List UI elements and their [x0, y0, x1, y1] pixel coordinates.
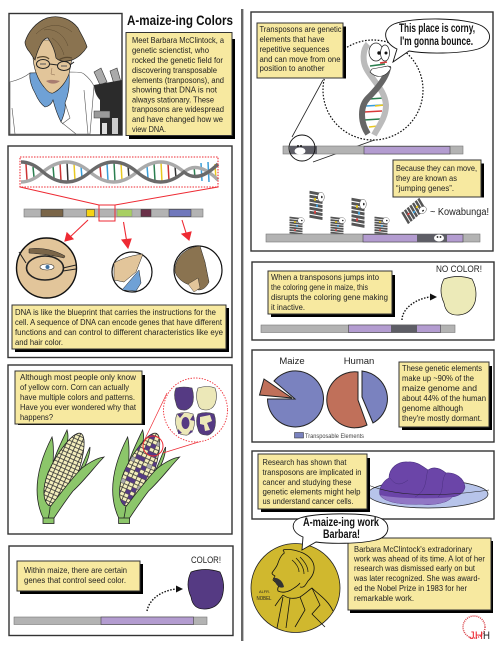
red zoom callout	[143, 378, 228, 456]
red arrows	[65, 220, 191, 248]
text box: intro: elements (tranposons), and	[132, 75, 224, 85]
label: color: COLOR!	[191, 555, 221, 565]
text box: disruption	[268, 271, 395, 317]
vertical divider	[241, 9, 243, 641]
text box: jumping genes: they are known as	[396, 173, 457, 183]
text box: transposon definition: Transposons are genetic	[260, 24, 342, 34]
text box: seed color: genes that control seed color.	[24, 575, 126, 585]
text box: research	[258, 454, 370, 512]
text box: Nobel Prize	[348, 538, 493, 613]
logo: JH	[469, 630, 483, 642]
text box: corn colors: Have you ever wondered why that	[20, 402, 137, 412]
text box: disruption: When a transposons jumps into	[271, 272, 379, 282]
text box: research: cancer and studying these	[262, 477, 352, 487]
text box: jumping genes	[393, 160, 484, 198]
text box: percentages: make up ~90% of the	[402, 373, 474, 383]
circle: eye	[16, 238, 76, 298]
gene bar disrupted	[261, 325, 455, 332]
circle: hair	[174, 246, 222, 294]
arrow: dotted	[147, 586, 183, 611]
gene bar	[14, 617, 207, 624]
magnifier lines	[292, 80, 383, 162]
red zoom frame	[20, 157, 218, 205]
arrow: dotted	[402, 294, 437, 320]
text box: seed color	[17, 561, 143, 594]
panel: genome share	[252, 350, 494, 442]
text box: DNA: DNA is like the blueprint that carries the instructions for the	[15, 307, 216, 317]
text box: intro: discovering transposable	[132, 65, 217, 75]
face	[33, 40, 72, 93]
hair	[25, 17, 87, 61]
text box: percentages	[399, 362, 492, 430]
text box: jumping genes: “jumping genes”.	[396, 183, 454, 193]
text box: intro: always stationary. These	[132, 94, 214, 104]
label: human: Human	[344, 356, 374, 367]
text box: corn colors: happens?	[20, 412, 53, 422]
icon: yellow corn	[36, 428, 104, 524]
gene bar with transposon	[283, 135, 463, 161]
label: maize: Maize	[279, 356, 305, 367]
glasses and features	[36, 57, 74, 84]
panel: cancer	[252, 451, 494, 519]
dashed circle	[323, 40, 423, 140]
medal name: ALFR.	[259, 589, 270, 594]
text box: DNA: functions and can control to different characteristics like eye	[15, 327, 223, 337]
text box: intro: and have changed how we	[132, 114, 223, 124]
text box: percentages: These genetic elements	[402, 363, 482, 373]
text box: intro	[126, 32, 235, 139]
text box: jumping genes: Because they can move,	[396, 163, 477, 173]
text box: intro: tranposons are widespread	[132, 104, 224, 114]
circle: collar	[112, 252, 152, 292]
microscope	[94, 68, 122, 135]
text box: research: transposons are implicated in	[262, 467, 362, 477]
panel: DNA blueprint	[8, 146, 232, 358]
icon: pale kernel	[441, 276, 476, 315]
DNA character	[362, 43, 391, 135]
text box: DNA	[12, 305, 229, 352]
jumping transposons	[290, 192, 428, 234]
logo: H	[483, 630, 490, 642]
speech bubble: praise: Barbara!	[323, 529, 360, 541]
text box: transposon definition: repetitive sequences	[260, 44, 330, 54]
text box: corn colors: have multiple colors and patterns.	[20, 392, 135, 402]
text box: percentages: genome although	[402, 403, 463, 413]
text box: DNA: cell. A sequence of DNA can encode genes that have different	[15, 317, 223, 327]
text box: intro: showing that DNA is not	[132, 84, 218, 94]
speech bubble: praise: A-maize-ing work	[303, 517, 379, 529]
text box: corn colors: of yellow corn. Corn can actually	[20, 382, 130, 392]
text box: intro: rocked the genetic field for	[132, 55, 223, 65]
text box: research: Research has shown that	[262, 457, 347, 467]
text box: intro: genetic scienctist, who	[132, 45, 209, 55]
panel: color gene	[9, 546, 233, 636]
text box: percentages: they're mostly dormant.	[402, 413, 482, 423]
text box: transposon definition: and can move from one	[260, 54, 341, 64]
speech bubble: corny	[386, 19, 490, 62]
panel: corn	[8, 365, 232, 534]
text box: Nobel Prize: Barbara McClintock's extradorinary	[354, 544, 473, 554]
text box: disruption: the coloring gene in maize, this	[271, 282, 368, 292]
text box: Nobel Prize: ed the Nobel Prize in 1983 for her	[354, 583, 467, 593]
speech bubble: praise	[293, 514, 388, 550]
petri dish and cells	[368, 462, 489, 508]
text box: corn colors: Although most people only know	[20, 372, 137, 382]
label: no color: NO COLOR!	[436, 264, 482, 274]
lab coat	[10, 72, 94, 134]
icon: multicolored corn	[110, 427, 180, 524]
gene bar bottom	[266, 234, 480, 242]
icon: purple kernel	[188, 570, 224, 609]
speech bubble: corny: I'm gonna bounce.	[400, 36, 473, 48]
text box: disruption: it inactive.	[271, 302, 305, 312]
text box: intro: view DNA.	[132, 124, 166, 134]
text box: DNA: and hair color.	[15, 337, 63, 347]
text box: transposon definition	[257, 23, 346, 78]
coat lapels	[12, 90, 88, 134]
text box: percentages: about 44% of the human	[402, 393, 486, 403]
text box: Nobel Prize: was later recognized. She was award-	[353, 573, 480, 583]
portrait engraving	[272, 549, 333, 628]
label: Kowabunga: ~ Kowabunga!	[430, 207, 489, 218]
medal name: NOBEL	[256, 596, 272, 602]
text box: transposon definition: elements that have	[260, 34, 325, 44]
blue collar	[30, 72, 69, 122]
text box: Nobel Prize: work was ahead of its time. A lot of her	[353, 554, 485, 564]
moustache	[273, 578, 284, 588]
panel: transposons	[251, 12, 493, 251]
medal name	[256, 589, 272, 602]
DNA helix	[21, 162, 218, 182]
panel: portrait of Barbara McClintock	[9, 14, 122, 135]
text box: corn colors	[15, 371, 145, 425]
text box: seed color: Within maize, there are certain	[24, 565, 127, 575]
logo	[463, 616, 490, 642]
text box: transposon definition: position to another	[260, 63, 325, 73]
medal: Nobel	[251, 544, 340, 632]
legend: Transposable Elements	[305, 433, 364, 440]
text box: Nobel Prize: research was dismissed early on but	[354, 563, 476, 573]
hair strokes	[292, 557, 308, 574]
text box: disruption: disrupts the coloring gene making	[271, 292, 388, 302]
title: A-maize-ing Colors	[127, 12, 233, 28]
text box: research: genetic elements might help	[262, 486, 361, 496]
kernels	[174, 386, 216, 435]
text box: Nobel Prize: remarkable work.	[354, 593, 414, 603]
text box: intro: Meet Barbara McClintock, a	[132, 35, 224, 45]
panel: no color	[252, 262, 494, 340]
pie chart: human	[327, 371, 387, 428]
text box: percentages: maize genome and	[402, 383, 477, 393]
pie chart: maize	[260, 371, 323, 427]
gene bar	[24, 205, 203, 221]
text box: research: us understand cancer cells.	[262, 496, 354, 506]
